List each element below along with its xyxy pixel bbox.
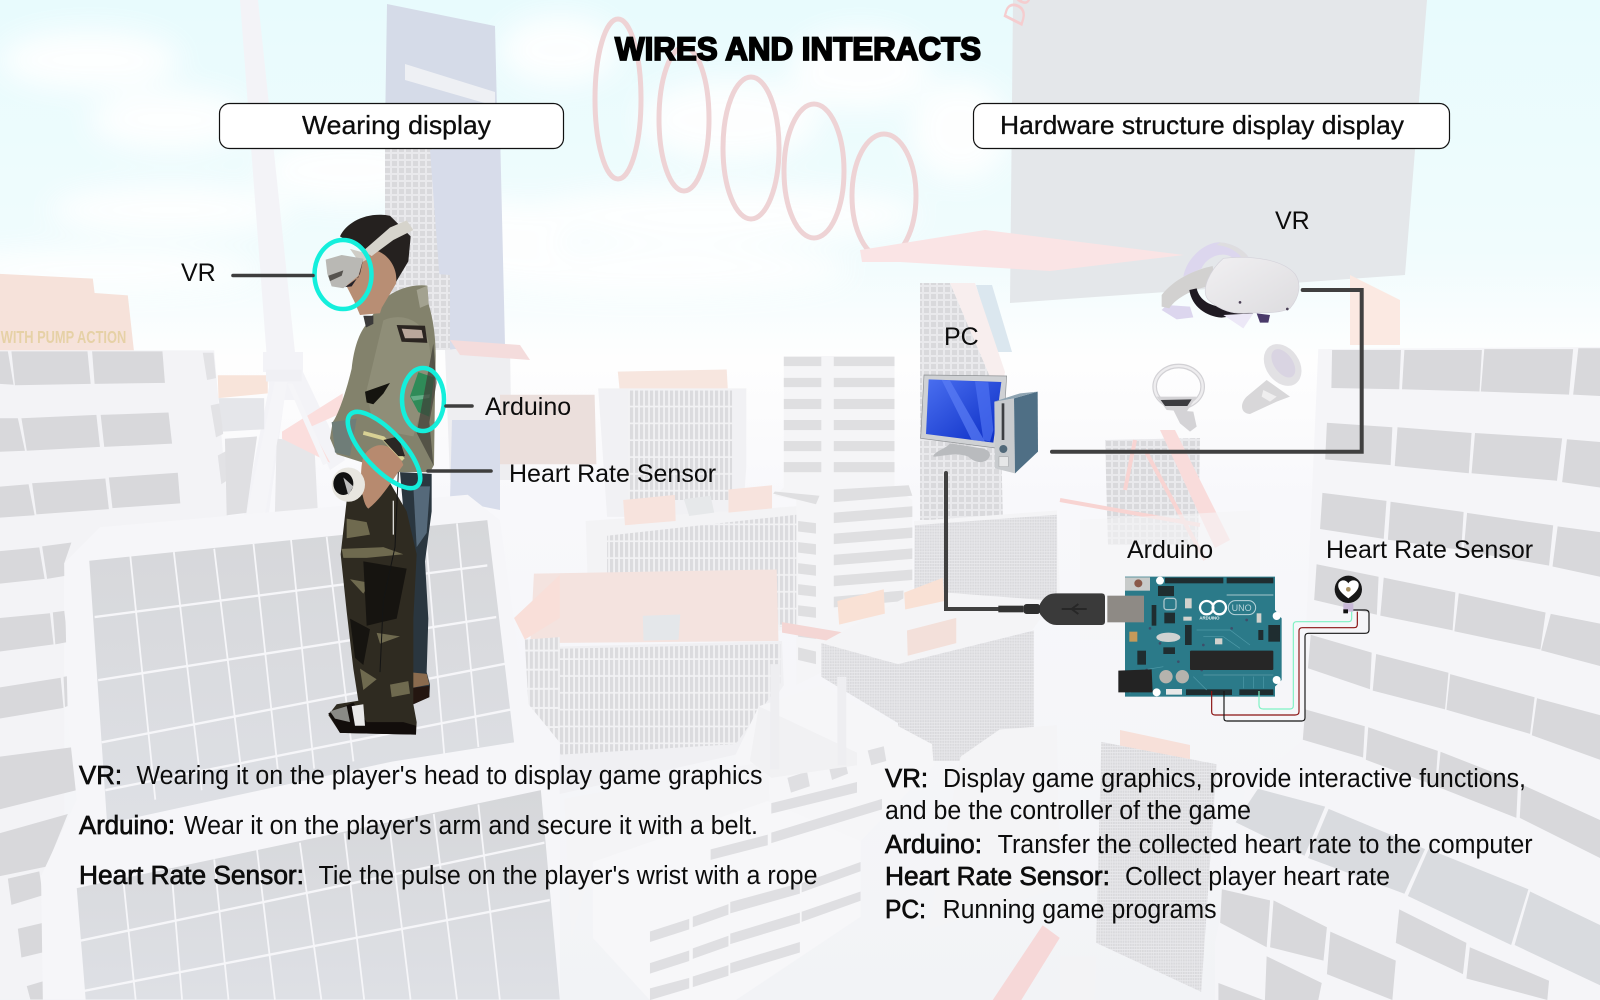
hand and wrist (361, 445, 403, 509)
figure: player wearing devices (326, 215, 437, 735)
text block: hardware descriptions: and be the controller of the game (885, 797, 1251, 825)
label: Arduino left: Arduino (485, 393, 571, 421)
title: WIRES AND INTERACTS (615, 31, 981, 67)
background: distant white spire and tripod (240, 0, 345, 525)
front leg camo pants (328, 483, 417, 735)
background: large grey panel (997, 0, 1427, 303)
controller (332, 467, 365, 502)
background: centre buildings (500, 356, 1060, 1000)
text block: wearing descriptions (79, 762, 818, 890)
arm band green arduino (410, 372, 434, 417)
label: heart rate sensor right: Heart Rate Sensor (1326, 536, 1533, 564)
text block: wearing descriptions: Wearing it on the player's head to display game graphics (136, 762, 762, 790)
headset body (326, 255, 363, 288)
background: pink rings (595, 19, 916, 258)
sandal (328, 702, 416, 735)
text block: hardware descriptions: Transfer the collected heart rate to the computer (998, 831, 1533, 859)
icon: USB plug and Arduino board: ARDUINO (1199, 615, 1220, 620)
hoodie (330, 285, 436, 472)
background: far right orange billboard (1350, 275, 1400, 345)
text block: hardware descriptions: Collect player heart rate (1125, 863, 1390, 891)
text block: wearing descriptions: Tie the pulse on the player's wrist with a rope (318, 862, 818, 890)
text block: hardware descriptions: Running game programs (943, 896, 1217, 924)
text block: wearing descriptions: VR: (79, 762, 122, 790)
icon: USB plug and Arduino board: UNO (1232, 603, 1252, 613)
background: navy tower (385, 4, 530, 510)
label: heart rate sensor left: Heart Rate Sensor (509, 460, 716, 488)
text block: hardware descriptions: Arduino: (885, 831, 982, 859)
text block: hardware descriptions: Display game graphics, provide interactive functions, (943, 765, 1526, 793)
label: VR right: VR (1275, 207, 1310, 235)
shoulder patch (397, 325, 427, 343)
label: Arduino right: Arduino (1127, 536, 1213, 564)
background: mid right grid tower and crane (1060, 430, 1260, 815)
heading: hardware structure display (974, 104, 1450, 148)
text block: wearing descriptions: Arduino: (79, 812, 175, 840)
highlight: heart rate sensor ring and leader (337, 401, 491, 499)
heading: hardware structure display: Hardware structure display display (1000, 110, 1404, 140)
chevron band (365, 383, 390, 404)
cable (380, 472, 398, 672)
text block: wearing descriptions: Heart Rate Sensor: (79, 862, 304, 890)
label: VR left: VR (181, 259, 216, 287)
icon: VR headset and controllers (1155, 242, 1309, 432)
text block: hardware descriptions: VR: (885, 765, 928, 793)
text block: wearing descriptions: Wear it on the player's arm and secure it with a belt. (184, 812, 758, 840)
icon: USB plug and Arduino board (998, 576, 1369, 721)
text block: hardware descriptions (885, 765, 1533, 924)
background: foreground white building with grid windows (41, 495, 560, 1000)
background: red roof (860, 230, 1184, 271)
background: right white building with grey windows (1060, 347, 1600, 1000)
icon: desktop PC (921, 375, 1038, 473)
highlight: VR ring and leader (233, 240, 372, 309)
connection wires (946, 290, 1362, 609)
heading: wearing display: Wearing display (302, 110, 491, 140)
background: left orange signs and building (0, 274, 343, 1000)
headset strap (363, 220, 413, 256)
heading: wearing display (220, 104, 564, 148)
background: left orange signs and building: WITH PUMP ACTION (1, 328, 126, 348)
text block: hardware descriptions: PC: (885, 896, 926, 924)
back leg jeans (400, 472, 432, 704)
highlight: Arduino ring and leader (402, 368, 472, 431)
text block: hardware descriptions: Heart Rate Sensor: (885, 863, 1110, 891)
background: PC tower building (920, 283, 1012, 520)
label: PC: PC (944, 323, 979, 351)
hair and head (340, 215, 411, 284)
